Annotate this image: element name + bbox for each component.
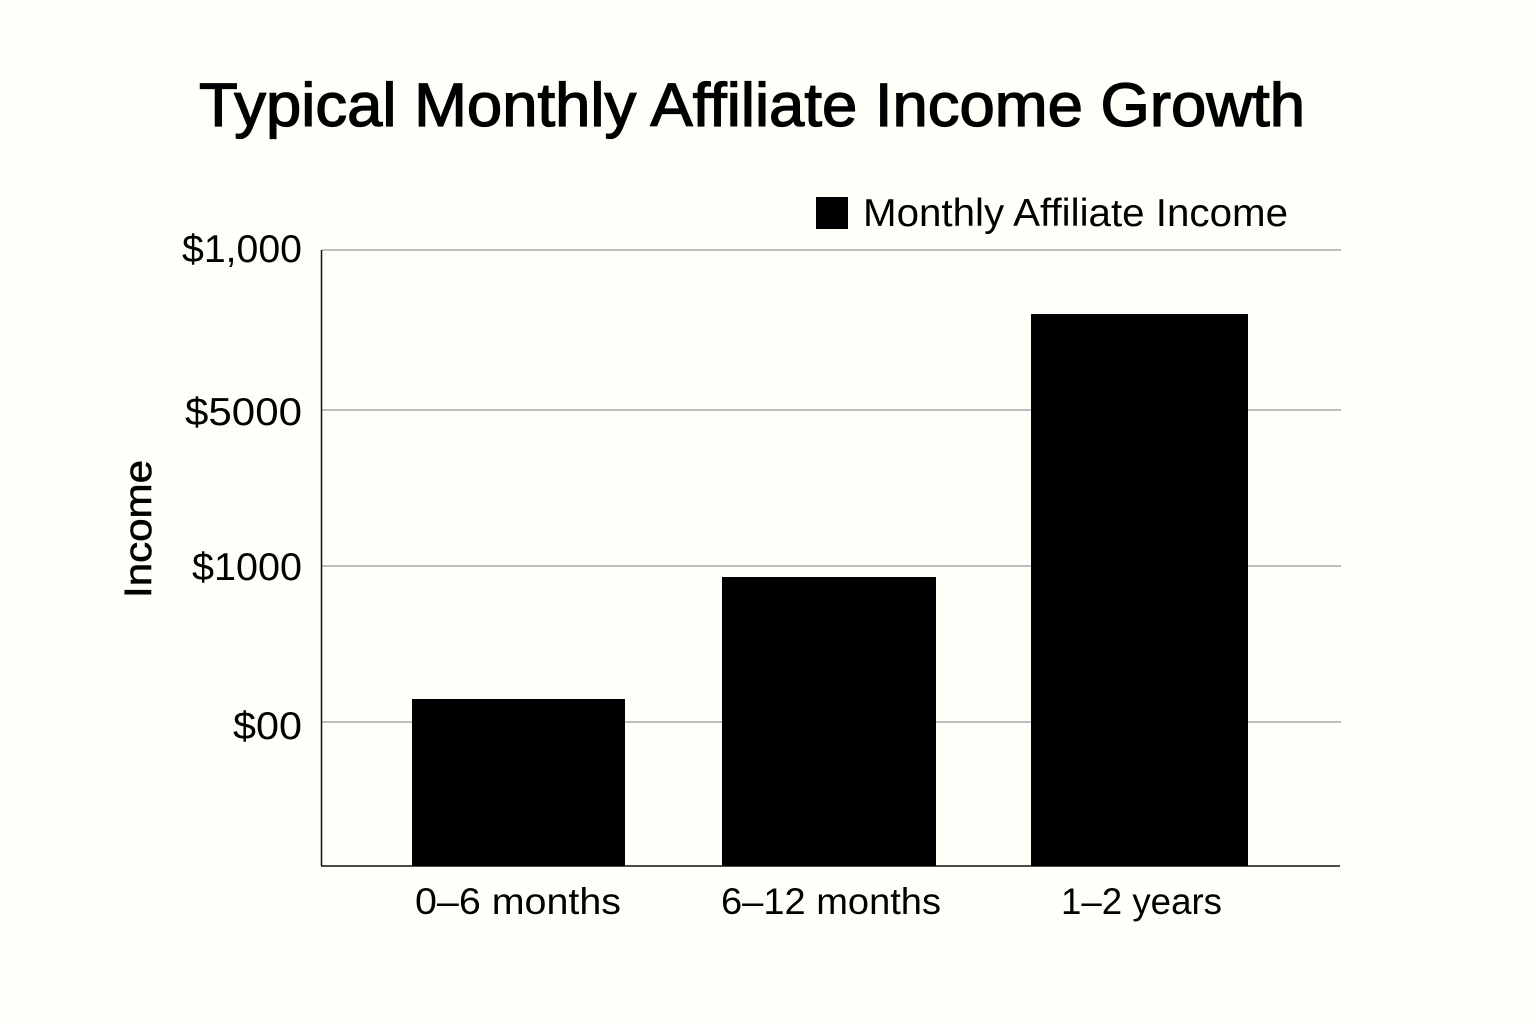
x axis labels: 0–6 months (415, 881, 621, 922)
bar: 0–6 months (412, 699, 625, 866)
legend swatch (816, 197, 848, 229)
y axis tick labels (182, 228, 302, 748)
y axis tick labels: $1,000 (182, 228, 302, 271)
x axis labels: 6–12 months (721, 881, 941, 922)
bar: 6–12 months (722, 577, 936, 866)
y axis title: Income (118, 460, 160, 598)
axes (321, 250, 1340, 866)
x axis labels: 1–2 years (1061, 881, 1222, 922)
legend label: Monthly Affiliate Income (863, 192, 1288, 235)
y axis tick labels: $5000 (185, 391, 302, 434)
title: Typical Monthly Affiliate Income Growth (199, 71, 1305, 139)
bar: 1–2 years (1031, 314, 1248, 866)
legend (816, 192, 1288, 235)
bars (412, 314, 1248, 866)
y axis tick labels: $1000 (192, 546, 302, 589)
gridlines (322, 250, 1341, 722)
y axis tick labels: $00 (233, 705, 302, 748)
x axis labels (415, 881, 1222, 922)
